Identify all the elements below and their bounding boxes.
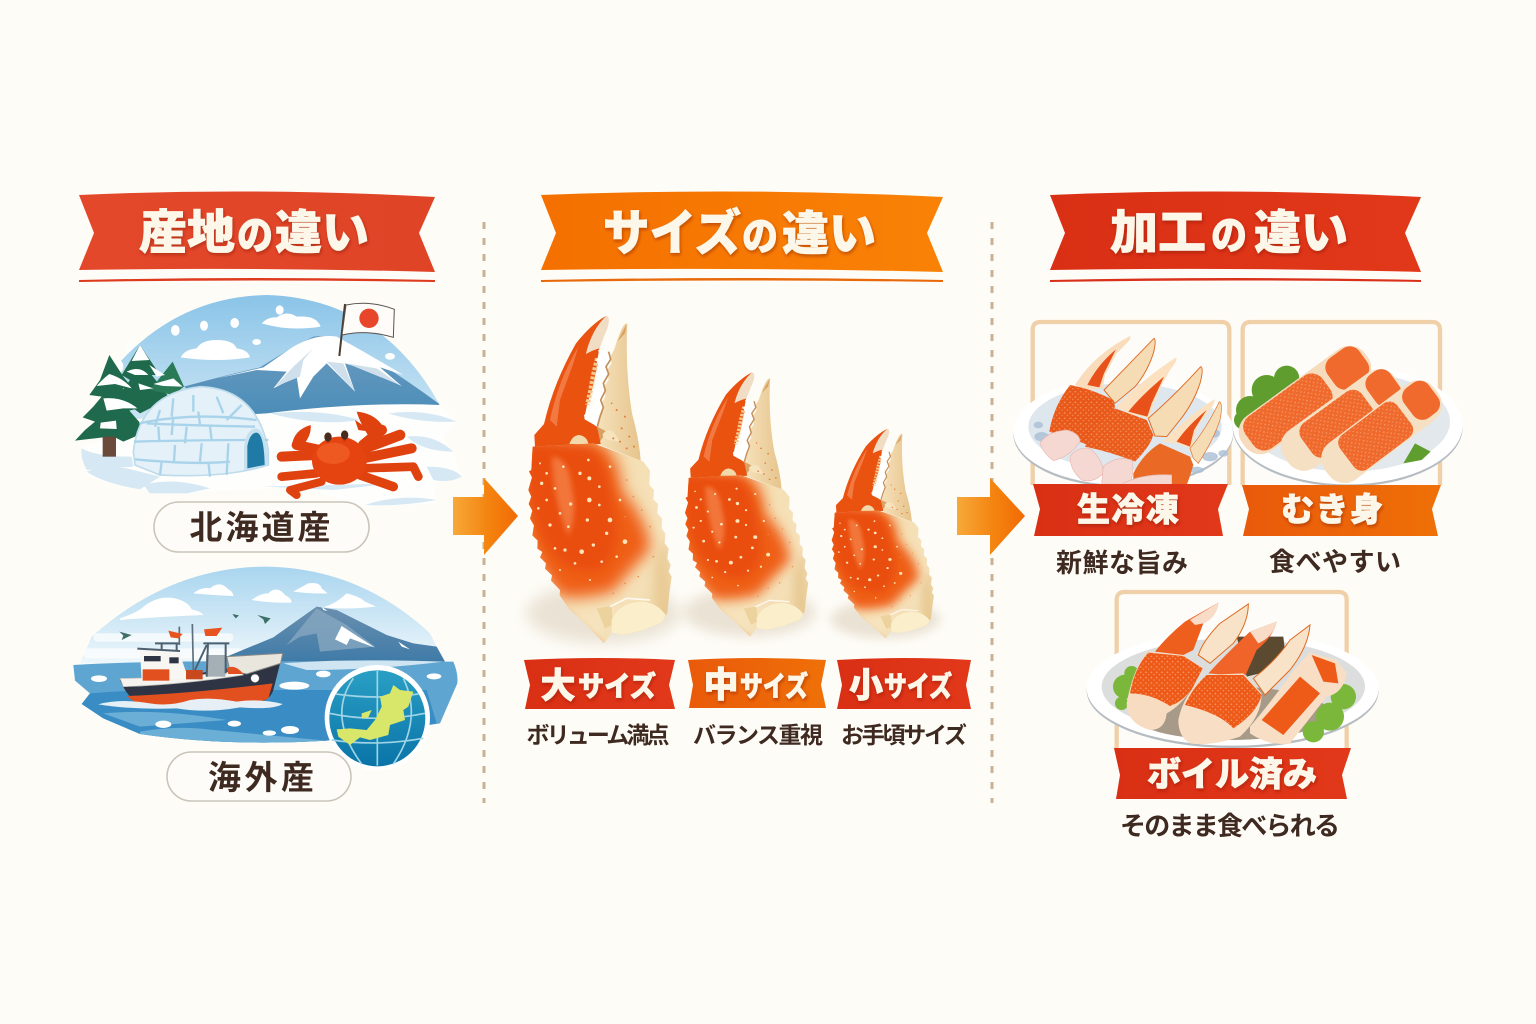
label: 生冷凍: 生冷凍 — [1077, 491, 1179, 528]
arrow: origin to size — [453, 478, 518, 555]
sky — [110, 295, 439, 420]
size label: small: サイズ — [884, 670, 952, 702]
sea — [73, 661, 457, 743]
size label: large: サイズ — [578, 670, 656, 702]
birds — [119, 614, 271, 640]
divider left — [482, 222, 486, 803]
arrow: size to processing — [957, 478, 1025, 555]
illustration: overseas sea scene — [73, 567, 457, 770]
igloo — [133, 387, 268, 477]
size label: large: 大 — [540, 667, 576, 706]
size label: small — [837, 658, 971, 709]
divider right — [990, 222, 994, 803]
size caption: large: ボリューム満点 — [526, 722, 670, 748]
heading: 産地の違い — [79, 191, 435, 282]
sky — [80, 567, 445, 663]
size label: large — [524, 658, 675, 709]
illustration: Hokkaido snow scene — [75, 295, 462, 507]
item: peeled crab plate — [1231, 322, 1463, 491]
panel: origin differences — [73, 191, 462, 801]
pine trees — [75, 345, 184, 457]
globe — [325, 665, 430, 770]
label: ボイル済み — [1114, 748, 1351, 799]
label: 生冷凍 — [1033, 484, 1228, 536]
caption: 食べやすい: 食べやすい — [1269, 547, 1401, 577]
heading: 産地の違い: 産地 — [139, 206, 235, 259]
size label: medium — [688, 658, 826, 708]
caption: そのまま食べられる: そのまま食べられる — [1120, 811, 1340, 841]
label pill: 海外産: 海外産 — [208, 759, 314, 796]
size label: medium: サイズ — [740, 670, 808, 702]
label pill: 北海道産 — [154, 502, 369, 552]
panel: processing differences — [1013, 191, 1463, 841]
heading: サイズの違い: の — [742, 215, 778, 259]
crab claw: medium — [675, 372, 815, 639]
heading: 産地の違い: の — [237, 214, 273, 258]
size caption: medium: バランス重視 — [693, 722, 823, 748]
size label: medium: 中 — [703, 666, 739, 705]
label: むき身: むき身 — [1281, 491, 1383, 528]
label: むき身 — [1242, 485, 1441, 536]
label pill: 北海道産: 北海道産 — [190, 509, 330, 546]
heading: 加工の違い — [1050, 191, 1421, 282]
crab claw: small — [823, 429, 940, 641]
caption: 新鮮な旨み: 新鮮な旨み — [1056, 548, 1188, 578]
fishing boat — [98, 624, 283, 711]
heading: サイズの違い: サイズ — [603, 206, 741, 261]
heading: 加工の違い: 加工 — [1110, 206, 1206, 259]
item: frozen crab plate — [1013, 322, 1233, 487]
heading: 加工の違い: 違い — [1254, 206, 1348, 259]
item: boiled crab plate — [1087, 592, 1379, 748]
label pill: 海外産 — [167, 752, 351, 801]
clouds — [120, 583, 376, 620]
heading: サイズの違い: 違い — [782, 207, 876, 260]
snow ground — [82, 404, 462, 507]
red crab — [282, 412, 418, 495]
mountain — [227, 607, 445, 662]
label: ボイル済み: ボイル済み — [1147, 756, 1317, 794]
panel: size differences — [517, 191, 971, 748]
heading: 加工の違い: の — [1211, 214, 1247, 258]
clouds — [117, 305, 410, 402]
heading: サイズの違い — [541, 191, 943, 282]
crab claw: large — [517, 316, 680, 647]
mountain — [184, 336, 439, 417]
heading: 産地の違い: 違い — [275, 206, 369, 259]
size label: small: 小 — [849, 667, 883, 705]
flag — [339, 303, 394, 356]
size caption: small: お手頃サイズ — [841, 722, 967, 748]
